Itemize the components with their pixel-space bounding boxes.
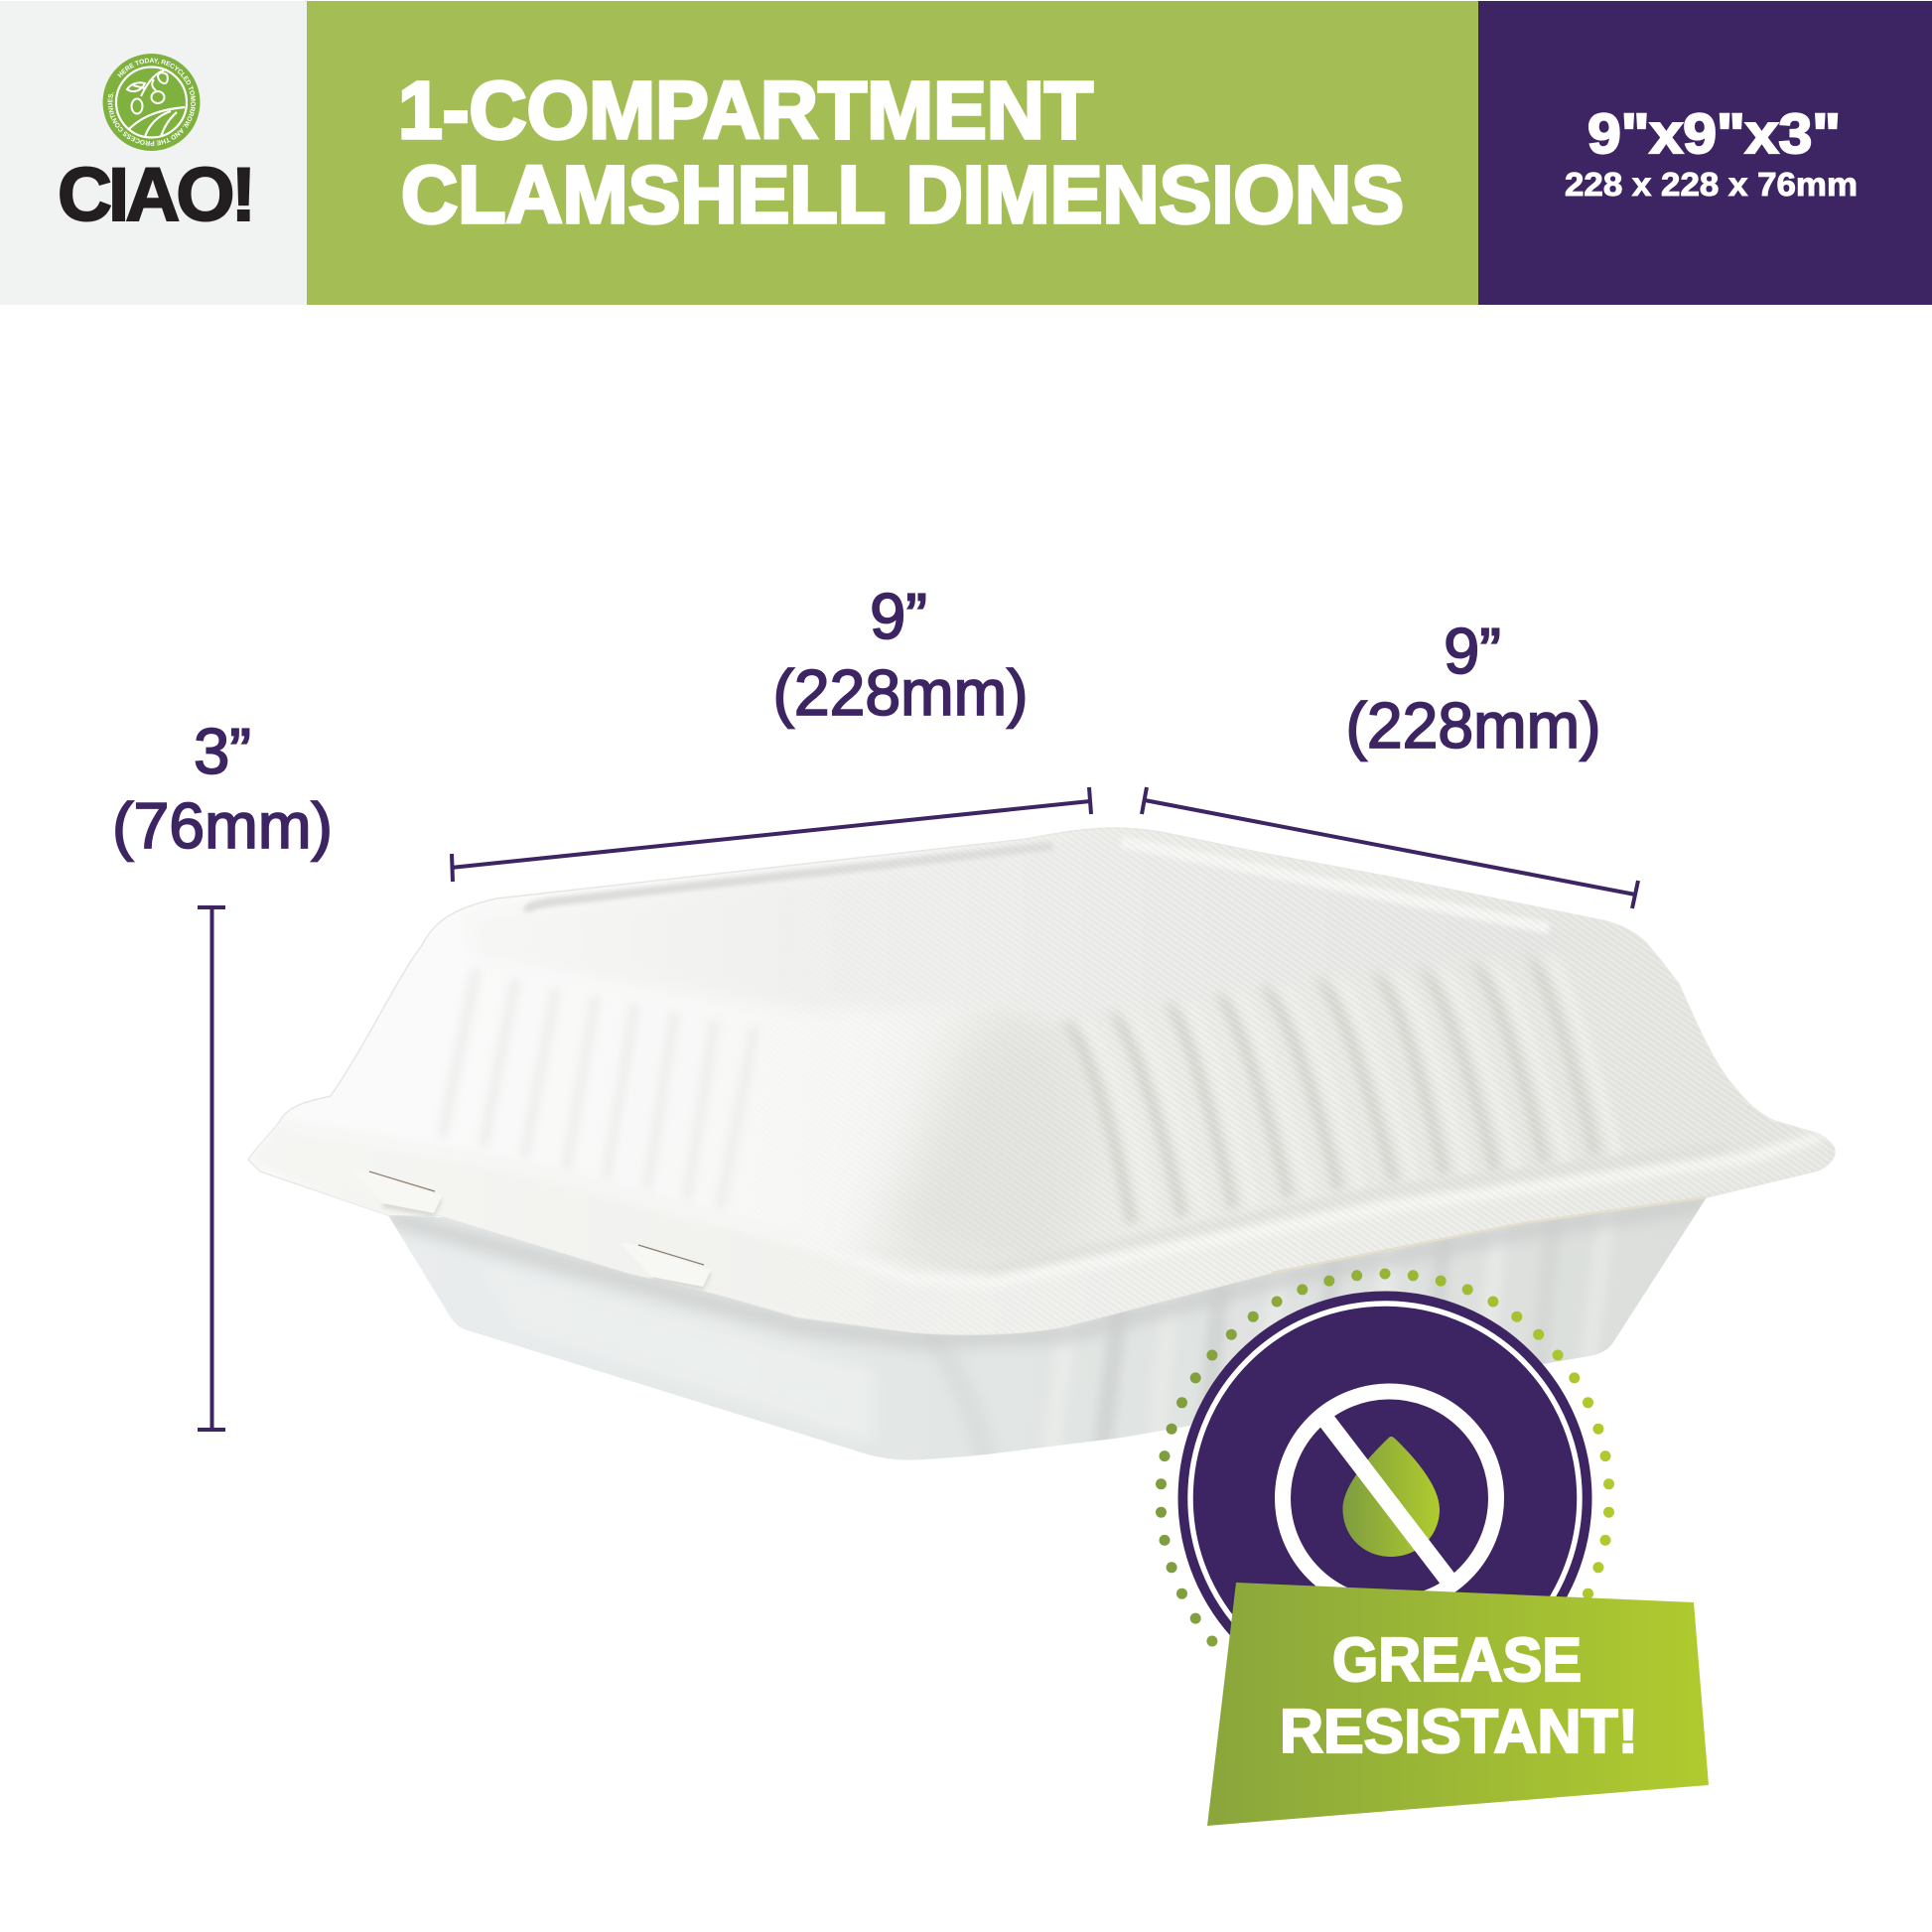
height dimension line	[198, 906, 225, 1431]
surface weave texture	[1061, 838, 1817, 1289]
lid	[248, 824, 1847, 1340]
title text: CLAMSHELL DIMENSIONS	[401, 150, 1404, 240]
title text	[398, 66, 1404, 240]
flange band	[320, 1160, 1111, 1334]
purple disc	[1177, 1291, 1592, 1706]
banner text: RESISTANT!	[1280, 1698, 1638, 1766]
front dimension label	[772, 580, 1029, 729]
corner shading	[887, 1020, 1068, 1265]
shadow under lid	[388, 1203, 1707, 1340]
size text: 228 x 228 x 76mm	[1565, 166, 1858, 203]
lid underside edge	[1272, 1197, 1707, 1273]
size text: 9"x9"x3"	[1587, 102, 1841, 166]
rim crease	[1132, 1134, 1821, 1256]
depth dimension: side	[1142, 615, 1638, 908]
green banner	[1207, 1583, 1709, 1826]
title panel	[307, 1, 1478, 305]
dotted ring	[1156, 1269, 1614, 1646]
header bar	[0, 1, 1932, 305]
front dimension label: (228mm)	[772, 656, 1029, 729]
width dimension: front	[451, 580, 1091, 882]
height dimension label: (76mm)	[112, 789, 333, 862]
size panel	[1478, 1, 1932, 305]
grease resistant badge	[1156, 1269, 1709, 1826]
top face shading	[753, 877, 1535, 1024]
side dimension label	[1346, 615, 1600, 761]
latch tab 1	[352, 1170, 443, 1217]
height dimension label	[112, 715, 333, 862]
logo panel	[0, 1, 307, 305]
product photo: clamshell container	[248, 824, 1847, 1469]
side dimension label: (228mm)	[1346, 689, 1600, 761]
logo wordmark: CIAO!	[58, 153, 256, 237]
front dimension line	[451, 787, 1091, 882]
banner text: GREASE	[1332, 1626, 1582, 1695]
height dimension	[112, 715, 333, 1431]
tray base	[388, 1191, 1707, 1469]
side dimension label: 9”	[1444, 615, 1501, 687]
top recess	[527, 846, 1052, 911]
side dimension line	[1142, 787, 1638, 908]
size text	[1565, 102, 1858, 203]
icon: no grease drop	[1283, 1392, 1496, 1604]
left face ribs	[441, 973, 712, 1179]
right face ribs	[1065, 944, 1595, 1223]
logo emblem: HERE TODAY, RECYCLED TOMORROW. AND THE PROCESS CONTINUES.	[107, 58, 196, 146]
height dimension label: 3”	[194, 715, 251, 787]
front dimension label: 9”	[870, 580, 927, 652]
latch tab 2	[621, 1243, 712, 1291]
banner text	[1280, 1626, 1638, 1766]
title text: 1-COMPARTMENT	[398, 66, 1093, 156]
